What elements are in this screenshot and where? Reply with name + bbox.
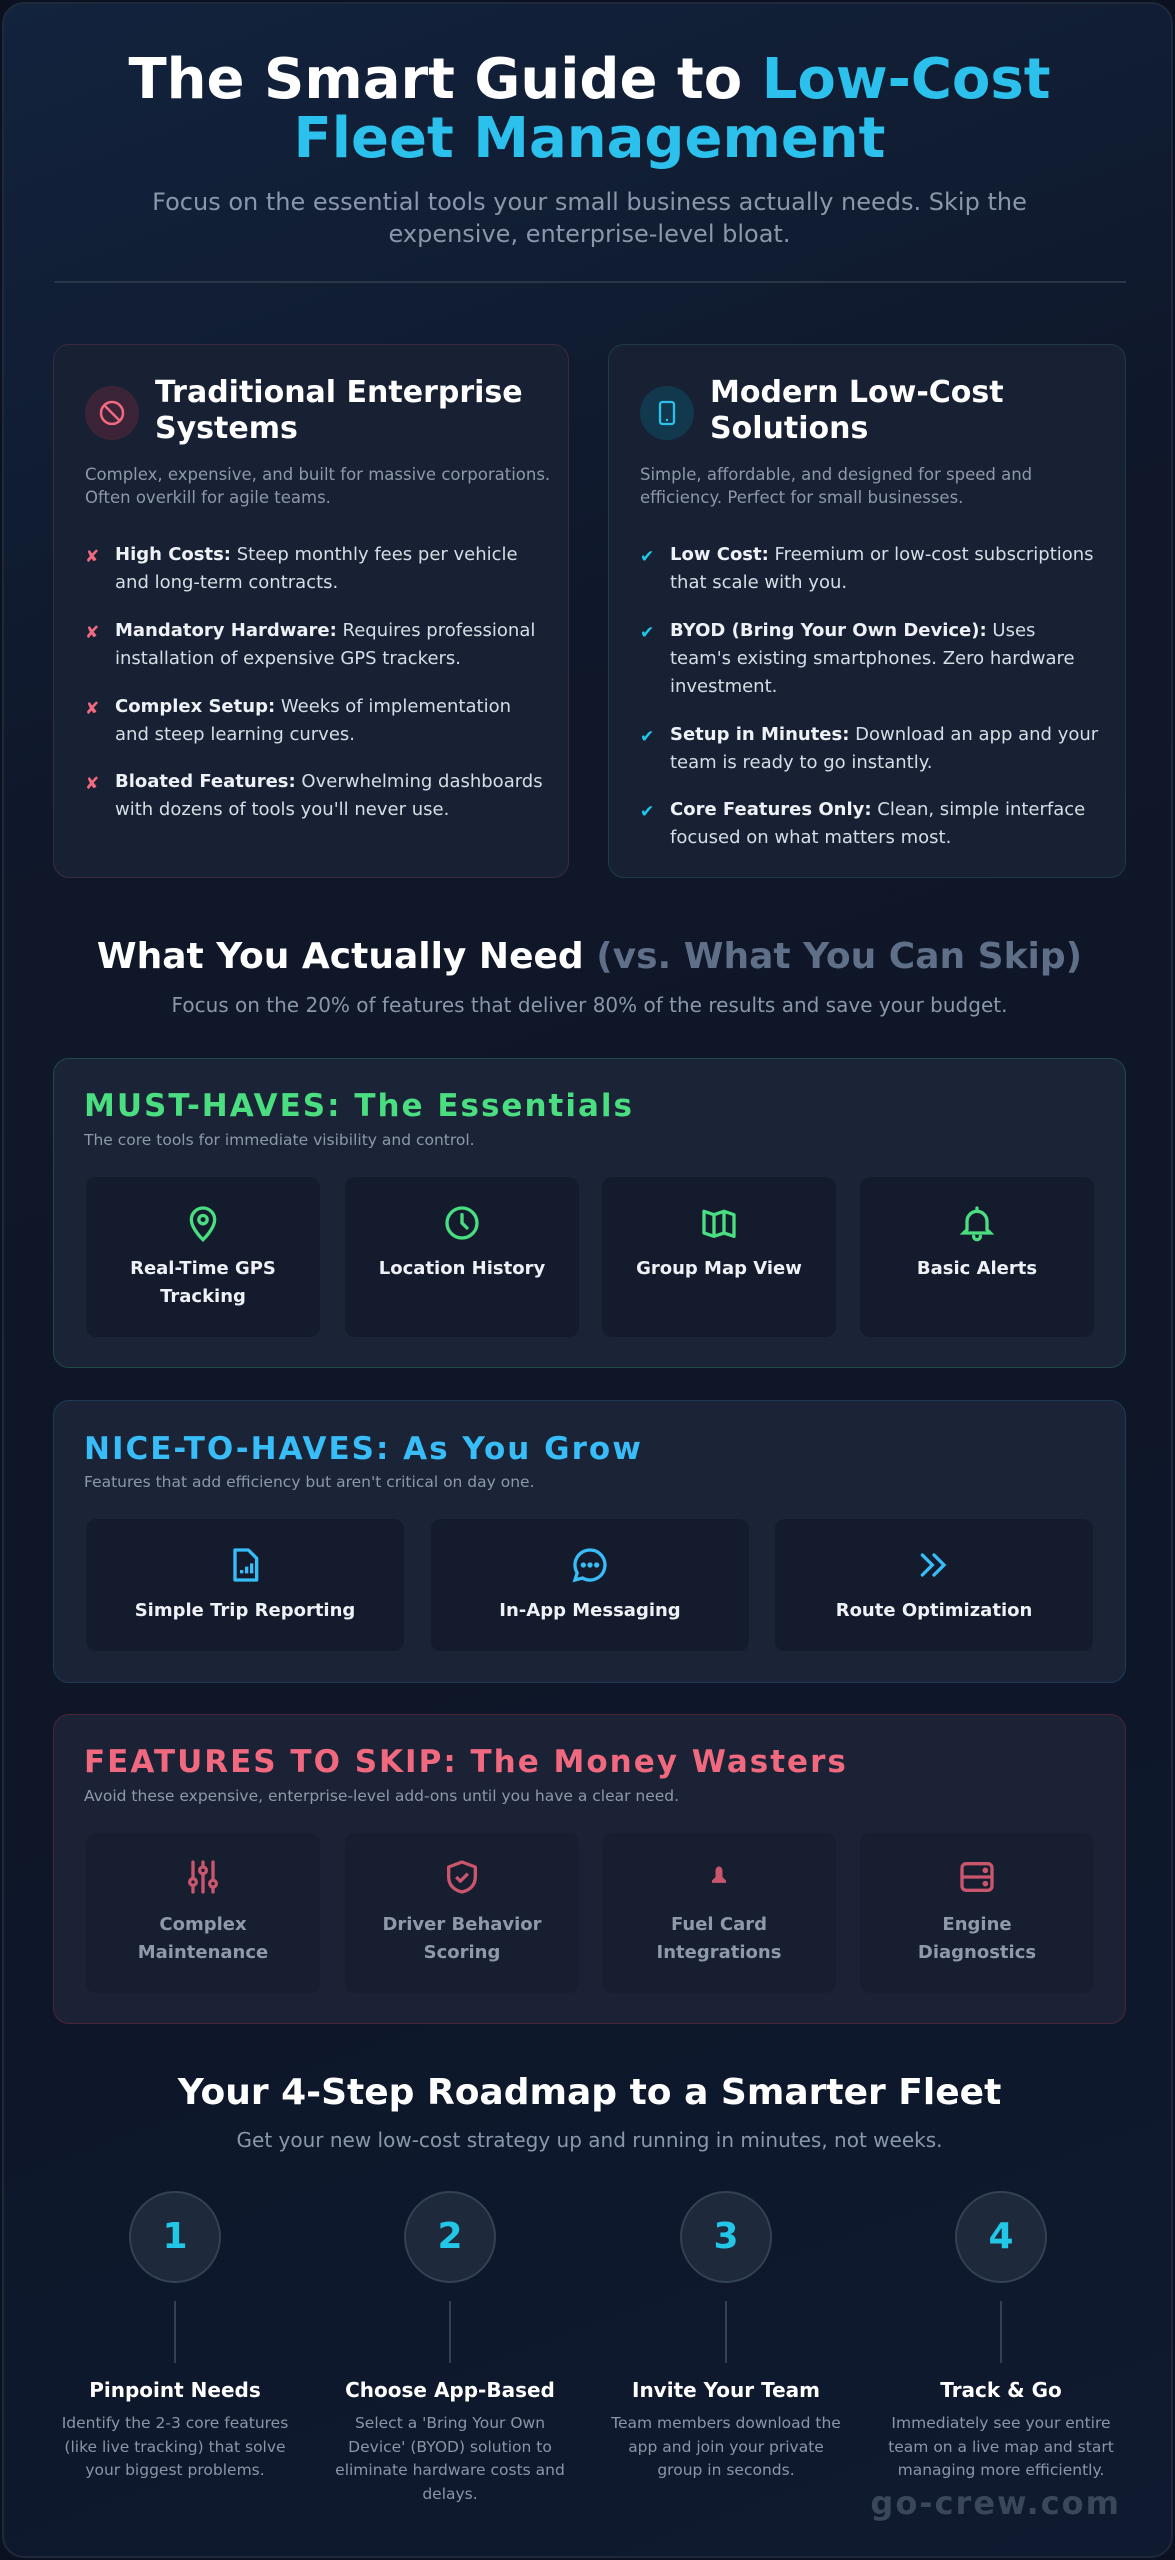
subtitle: Avoid these expensive, enterprise-level add-ons until you have a clear need. bbox=[84, 1787, 679, 1805]
card: trip reporting bbox=[86, 1519, 404, 1651]
roadmap heading: Your 4-Step Roadmap to a Smarter Fleet bbox=[178, 2072, 1001, 2113]
step 2: Choose App-Based bbox=[345, 2378, 555, 2402]
heading: NICE-TO-HAVES: As You Grow bbox=[84, 1431, 643, 1467]
card: route optimization bbox=[775, 1519, 1093, 1651]
panel: traditional enterprise systems: ✘ bbox=[85, 547, 99, 567]
subtitle: Features that add efficiency but aren't critical on day one. bbox=[84, 1473, 535, 1491]
card: group map view: Group Map View bbox=[636, 1258, 802, 1279]
heading: Systems bbox=[155, 411, 298, 446]
step 4: Track & Go bbox=[940, 2378, 1062, 2402]
description bbox=[640, 465, 1032, 507]
panel: modern low-cost solutions: ✔ bbox=[640, 802, 654, 822]
card: real-time gps: Tracking bbox=[160, 1286, 246, 1307]
bullet list: BYOD (Bring Your Own Device): Uses bbox=[670, 620, 1035, 641]
panel: traditional enterprise systems: ✘ bbox=[85, 623, 99, 643]
panel: traditional enterprise systems bbox=[53, 344, 569, 878]
panel: modern low-cost solutions: ✔ bbox=[640, 727, 654, 747]
bullet list: and long-term contracts. bbox=[115, 572, 338, 593]
card: driver behavior: Scoring bbox=[424, 1942, 500, 1963]
heading: Traditional Enterprise bbox=[155, 375, 523, 410]
step 2: Select a 'Bring Your Own Device' (BYOD) solution to eliminate hardware costs and delays. bbox=[335, 2414, 565, 2502]
card: engine diagnostics: Diagnostics bbox=[918, 1942, 1036, 1963]
card: group map view bbox=[602, 1177, 836, 1337]
card: in-app messaging bbox=[431, 1519, 749, 1651]
description: Simple, affordable, and designed for speed and bbox=[640, 465, 1032, 484]
card: engine diagnostics bbox=[860, 1833, 1094, 1993]
step 1 bbox=[62, 2191, 288, 2479]
title: Fleet Management bbox=[294, 106, 885, 171]
step 3: Team members download the app and join your private group in seconds. bbox=[611, 2414, 841, 2479]
card: real-time gps bbox=[86, 1177, 320, 1337]
step 4: 4 bbox=[988, 2216, 1014, 2257]
bullet list: focused on what matters most. bbox=[670, 827, 951, 848]
bullet list: Low Cost: Freemium or low-cost subscriptions bbox=[670, 544, 1094, 565]
card: complex maintenance: Maintenance bbox=[138, 1942, 268, 1963]
heading: Modern Low-Cost bbox=[710, 375, 1004, 410]
subtitle bbox=[152, 188, 1027, 248]
step 3: 3 bbox=[713, 2216, 739, 2257]
step 1: 1 bbox=[162, 2216, 188, 2257]
bullet list: Core Features Only: Clean, simple interface bbox=[670, 799, 1085, 820]
step 4 bbox=[888, 2191, 1114, 2479]
card: engine diagnostics: Engine bbox=[942, 1914, 1012, 1935]
watermark: go-crew.com bbox=[870, 2484, 1121, 2522]
card: driver behavior: Driver Behavior bbox=[382, 1914, 542, 1935]
bullet list: Mandatory Hardware: Requires professional bbox=[115, 620, 535, 641]
icon: phone bbox=[640, 386, 694, 440]
card: fuel card bbox=[602, 1833, 836, 1993]
bullet list: Setup in Minutes: Download an app and your bbox=[670, 724, 1098, 745]
subtitle: Focus on the essential tools your small business actually needs. Skip the bbox=[152, 188, 1027, 216]
panel: modern low-cost solutions: ✔ bbox=[640, 623, 654, 643]
card: route optimization: Route Optimization bbox=[836, 1600, 1032, 1621]
bullet list: High Costs: Steep monthly fees per vehicle bbox=[115, 544, 518, 565]
card: real-time gps: Real-Time GPS bbox=[130, 1258, 276, 1279]
step 3: Invite Your Team bbox=[632, 2378, 820, 2402]
icon: prohibited bbox=[85, 386, 139, 440]
title: The Smart Guide to Low-Cost bbox=[128, 47, 1051, 112]
card: basic alerts: Basic Alerts bbox=[917, 1258, 1037, 1279]
card: fuel card: Integrations bbox=[657, 1942, 781, 1963]
description: Often overkill for agile teams. bbox=[85, 488, 331, 507]
bullet list bbox=[85, 544, 543, 820]
card: fuel card: Fuel Card bbox=[671, 1914, 767, 1935]
card: location history: Location History bbox=[379, 1258, 545, 1279]
step 4: Immediately see your entire team on a live map and start managing more efficiently. bbox=[888, 2414, 1114, 2479]
heading: MUST-HAVES: The Essentials bbox=[84, 1088, 634, 1124]
subtitle: The core tools for immediate visibility and control. bbox=[84, 1131, 475, 1149]
card: trip reporting: Simple Trip Reporting bbox=[135, 1600, 355, 1621]
heading bbox=[710, 375, 1004, 446]
bullet list: investment. bbox=[670, 676, 777, 697]
panel: must-haves bbox=[53, 1058, 1126, 1368]
step 3 bbox=[611, 2191, 841, 2479]
card: in-app messaging: In-App Messaging bbox=[499, 1600, 681, 1621]
panel: traditional enterprise systems: ✘ bbox=[85, 699, 99, 719]
section heading: what you actually need: What You Actually Need (vs. What You Can Skip) bbox=[97, 936, 1082, 977]
card: complex maintenance: Complex bbox=[159, 1914, 247, 1935]
card: driver behavior bbox=[345, 1833, 579, 1993]
heading: FEATURES TO SKIP: The Money Wasters bbox=[84, 1744, 848, 1780]
subtitle: expensive, enterprise-level bloat. bbox=[389, 220, 790, 248]
panel: modern low-cost solutions bbox=[608, 344, 1126, 878]
description bbox=[85, 465, 550, 507]
panel: nice-to-haves bbox=[53, 1400, 1126, 1683]
card: location history bbox=[345, 1177, 579, 1337]
roadmap subtitle: Get your new low-cost strategy up and running in minutes, not weeks. bbox=[237, 2128, 942, 2152]
card: complex maintenance bbox=[86, 1833, 320, 1993]
panel: features to skip bbox=[53, 1714, 1126, 2024]
bullet list: team's existing smartphones. Zero hardware bbox=[670, 648, 1075, 669]
heading: Solutions bbox=[710, 411, 868, 446]
step 1: Pinpoint Needs bbox=[89, 2378, 261, 2402]
bullet list: Bloated Features: Overwhelming dashboards bbox=[115, 771, 543, 792]
section subtitle: Focus on the 20% of features that deliver 80% of the results and save your budget. bbox=[172, 993, 1007, 1017]
bullet list: and steep learning curves. bbox=[115, 724, 355, 745]
title bbox=[128, 47, 1051, 171]
step 2: 2 bbox=[437, 2216, 463, 2257]
description: efficiency. Perfect for small businesses. bbox=[640, 488, 963, 507]
panel: traditional enterprise systems: ✘ bbox=[85, 774, 99, 794]
description: Complex, expensive, and built for massive corporations. bbox=[85, 465, 550, 484]
step 2 bbox=[335, 2191, 565, 2502]
bullet list: team is ready to go instantly. bbox=[670, 752, 933, 773]
bullet list bbox=[640, 544, 1098, 848]
bullet list: installation of expensive GPS trackers. bbox=[115, 648, 461, 669]
card: basic alerts bbox=[860, 1177, 1094, 1337]
bullet list: with dozens of tools you'll never use. bbox=[115, 799, 449, 820]
heading bbox=[155, 375, 523, 446]
panel: modern low-cost solutions: ✔ bbox=[640, 547, 654, 567]
bullet list: that scale with you. bbox=[670, 572, 847, 593]
bullet list: Complex Setup: Weeks of implementation bbox=[115, 696, 511, 717]
step 1: Identify the 2-3 core features (like live tracking) that solve your biggest problems. bbox=[62, 2414, 288, 2479]
